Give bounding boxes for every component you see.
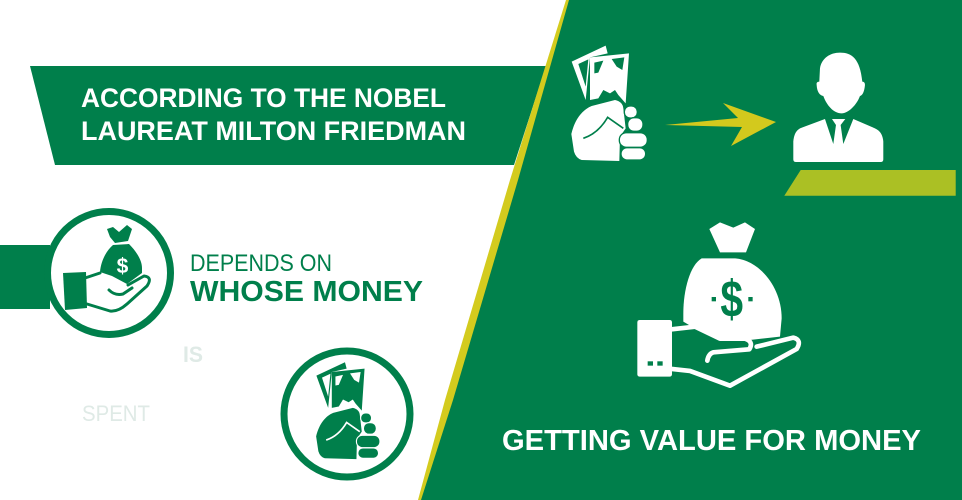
icon: hand holding money bag [637,222,799,386]
divider: yellow diagonal stripe [418,0,569,500]
heading: getting value for money: GETTING VALUE FOR MONEY [502,425,921,457]
panel: right green background [420,0,962,500]
icon: left tab and money bag in hand circle: $ [117,255,129,278]
icon: hand holding money bag: $ [720,270,743,328]
decoration: olive bar under person [784,170,956,196]
arrow: yellow arrow to person [665,103,776,146]
text: depends on whose money: WHOSE MONEY [190,276,423,308]
heading: banner title: ACCORDING TO THE NOBEL [81,83,446,113]
heading: banner title: LAUREAT MILTON FRIEDMAN [81,116,466,146]
icon: white fist with cash [571,46,647,161]
text: depends on whose money [190,250,423,308]
icon: fist with cash in circle [284,351,410,477]
text: spent: SPENT [82,401,150,426]
icon: person in suit [793,53,883,162]
icon: left tab and money bag in hand circle [0,212,170,334]
text: depends on whose money: DEPENDS ON [190,250,332,277]
heading: banner title [81,83,466,146]
panel: title banner [30,66,546,165]
text: is: IS [183,342,203,367]
